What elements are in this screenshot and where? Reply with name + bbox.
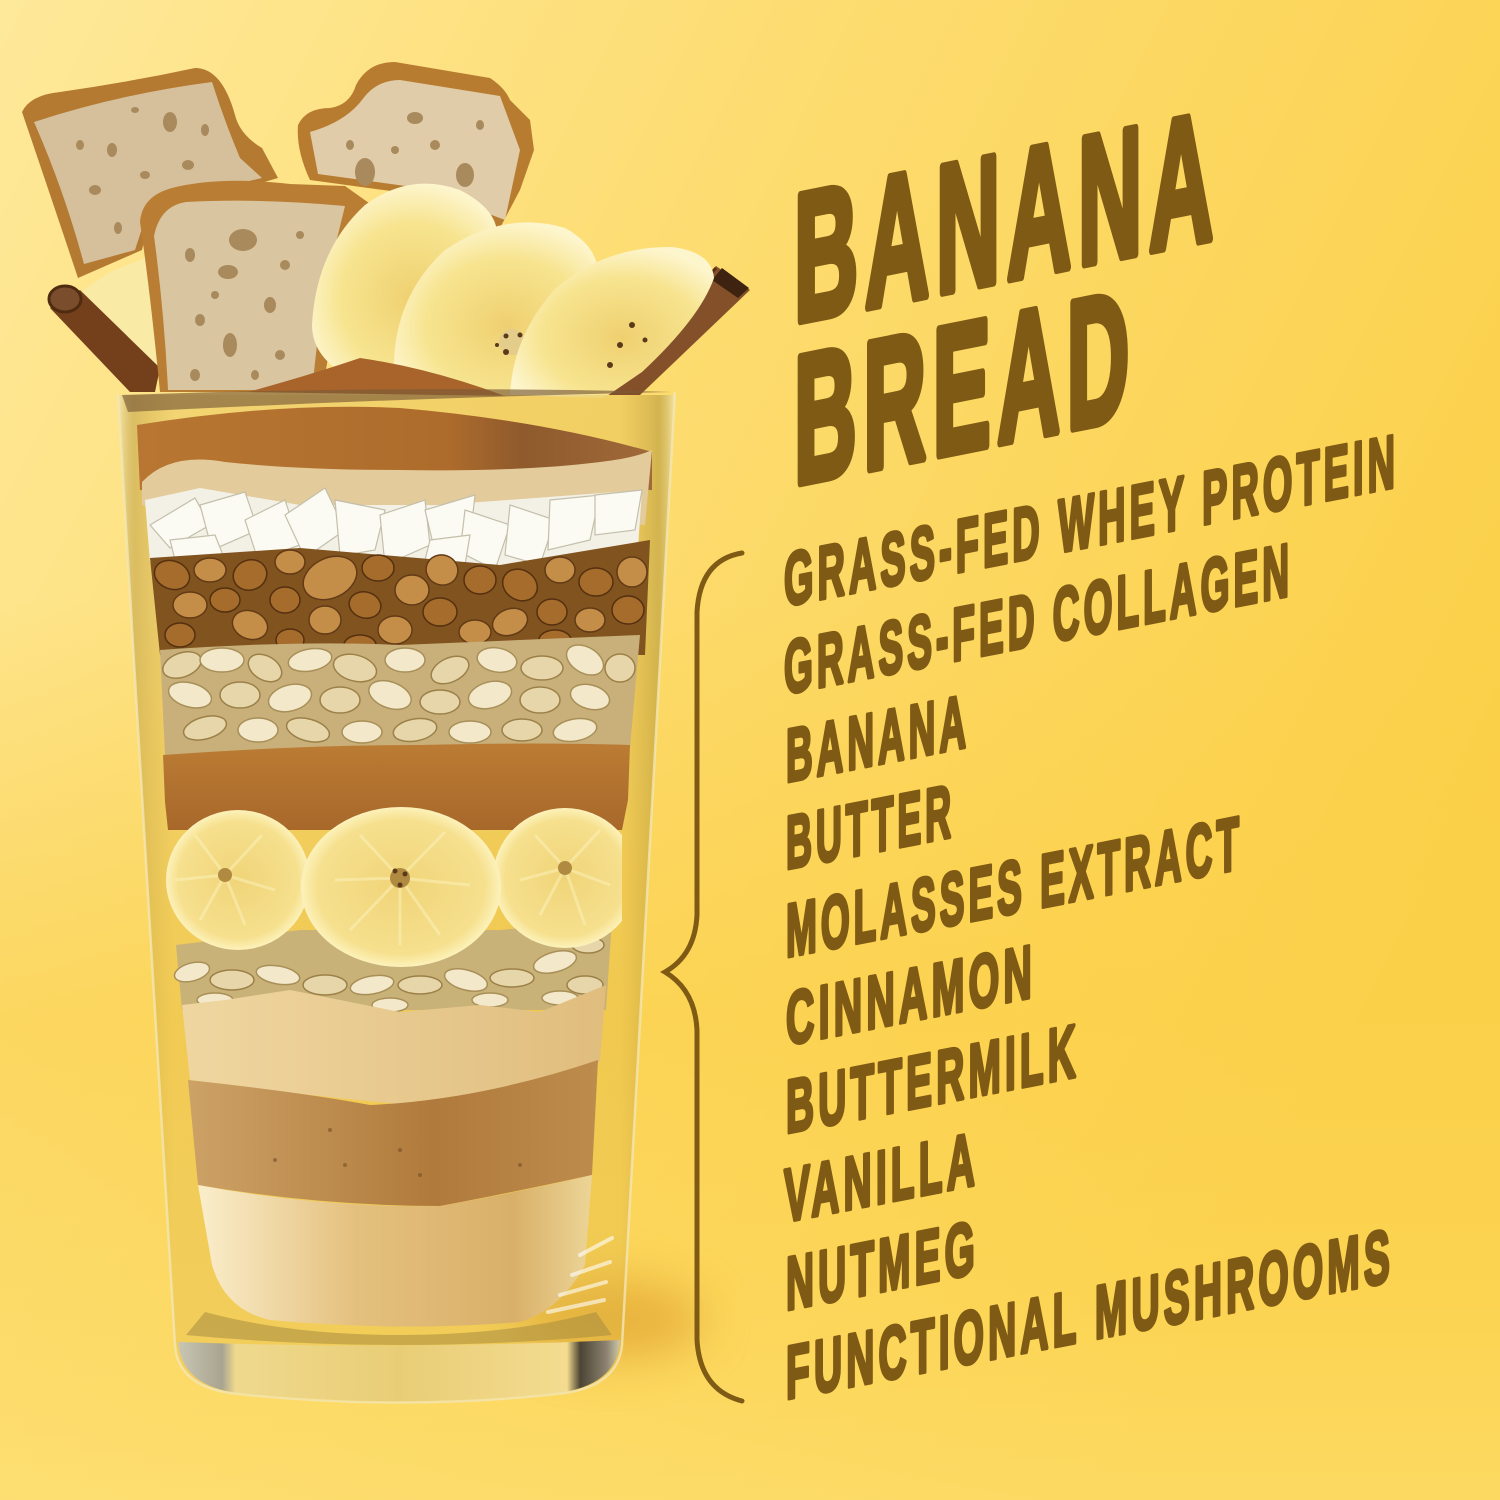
layer: cream powder [198, 1175, 592, 1327]
layer: coconut flakes [145, 488, 642, 575]
glass shadow [515, 1280, 705, 1360]
ingredient list: VANILLA [784, 1117, 979, 1239]
bread slice: back right [298, 62, 534, 228]
bread slice: back left [22, 68, 278, 278]
layer: rolled oats upper [159, 635, 640, 755]
ingredient list: NUTMEG [786, 1205, 979, 1327]
glass rim [122, 389, 672, 412]
banana wedge [62, 257, 162, 370]
layer: cinnamon powder [137, 407, 652, 490]
cinnamon stick: right [596, 266, 750, 395]
bread slice: front [140, 181, 376, 392]
cinnamon stick: left [49, 286, 160, 392]
layer: rolled oats lower [172, 920, 612, 1012]
toppings [22, 62, 750, 398]
layer: banana slices [166, 807, 637, 967]
glass base [178, 1340, 620, 1401]
banana slice: center [301, 807, 501, 967]
glass outline [118, 392, 675, 1402]
bracket [665, 553, 742, 1401]
banana slice: right [496, 808, 622, 948]
glass with layers [118, 389, 675, 1402]
title: Banana Bread: BREAD [794, 251, 1136, 523]
glass highlights [548, 1238, 612, 1312]
banana slice: third [510, 247, 714, 398]
banana slice: left [166, 810, 310, 950]
glass body [118, 395, 675, 1402]
layer: oat crumb [142, 450, 652, 525]
banana slice: first [312, 184, 497, 375]
layer: walnuts [150, 540, 650, 655]
title: Banana Bread [794, 72, 1220, 523]
layer: tan powder [182, 985, 606, 1104]
cinnamon powder mound [248, 358, 505, 396]
banana slice: second [394, 222, 599, 396]
ingredient list: BUTTERMILK [786, 1008, 1080, 1150]
glass inner ring [186, 1312, 612, 1345]
ingredient list [784, 419, 1399, 1416]
layer: brown powder [188, 1060, 598, 1206]
ingredient list: BUTTER [786, 769, 955, 886]
layer: caramel band [163, 744, 630, 830]
ingredient list: CINNAMON [786, 929, 1036, 1062]
ingredient list: BANANA [786, 679, 970, 799]
